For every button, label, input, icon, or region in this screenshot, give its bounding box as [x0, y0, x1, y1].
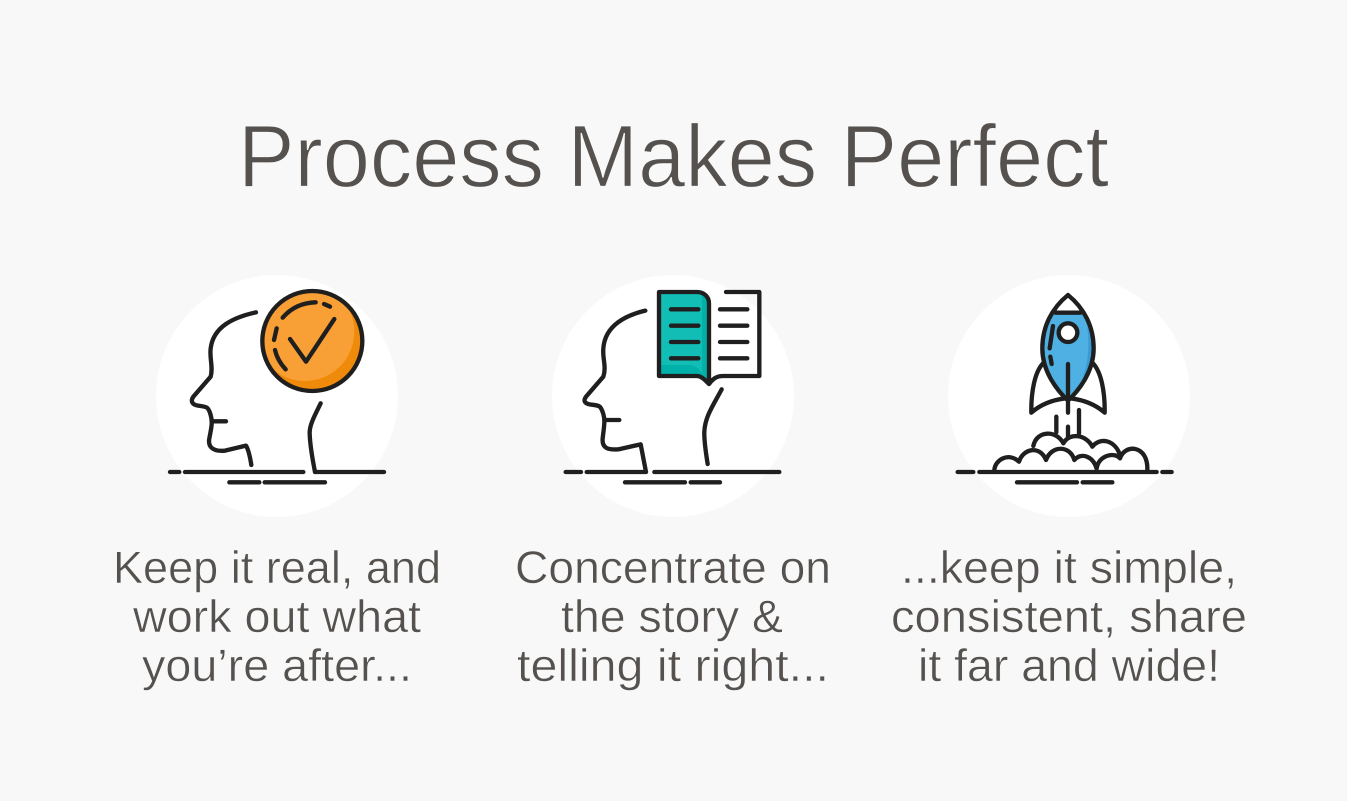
exhaust trails [1056, 410, 1079, 437]
ground lines [958, 472, 1172, 482]
caption: concentrate on the story: telling it right... [517, 640, 829, 691]
rocket [1031, 295, 1105, 413]
panel: concentrate on the story [515, 275, 831, 691]
caption: share it far and wide: consistent, share [891, 591, 1247, 642]
icon backdrop circle [156, 275, 398, 517]
caption: concentrate on the story: Concentrate on [515, 542, 831, 593]
panel: share it far and wide [891, 275, 1247, 691]
caption: share it far and wide: ...keep it simple, [901, 542, 1237, 593]
caption: concentrate on the story: the story & [561, 591, 783, 642]
orange check badge [256, 282, 362, 391]
caption: share it far and wide: it far and wide! [918, 640, 1220, 691]
head outline [585, 311, 722, 472]
icon backdrop circle [552, 275, 794, 517]
icon: rocket launching [958, 295, 1172, 482]
icon backdrop circle [948, 275, 1190, 517]
panel: keep it real [113, 275, 441, 691]
caption: concentrate on the story [515, 542, 831, 691]
title: Process Makes Perfect [238, 106, 1109, 206]
infographic canvas [116, 123, 1245, 690]
icon: head with orange check badge [170, 282, 384, 482]
caption: keep it real [113, 542, 441, 691]
caption: keep it real: you’re after... [142, 640, 412, 691]
head outline [192, 312, 321, 472]
ground lines [566, 472, 779, 482]
caption: keep it real: work out what [132, 591, 422, 642]
smoke clouds [994, 434, 1147, 470]
open book [659, 292, 759, 385]
caption: keep it real: Keep it real, and [113, 542, 441, 593]
ground lines [170, 472, 384, 482]
icon: head with open book [566, 292, 779, 482]
caption: share it far and wide [891, 542, 1247, 691]
